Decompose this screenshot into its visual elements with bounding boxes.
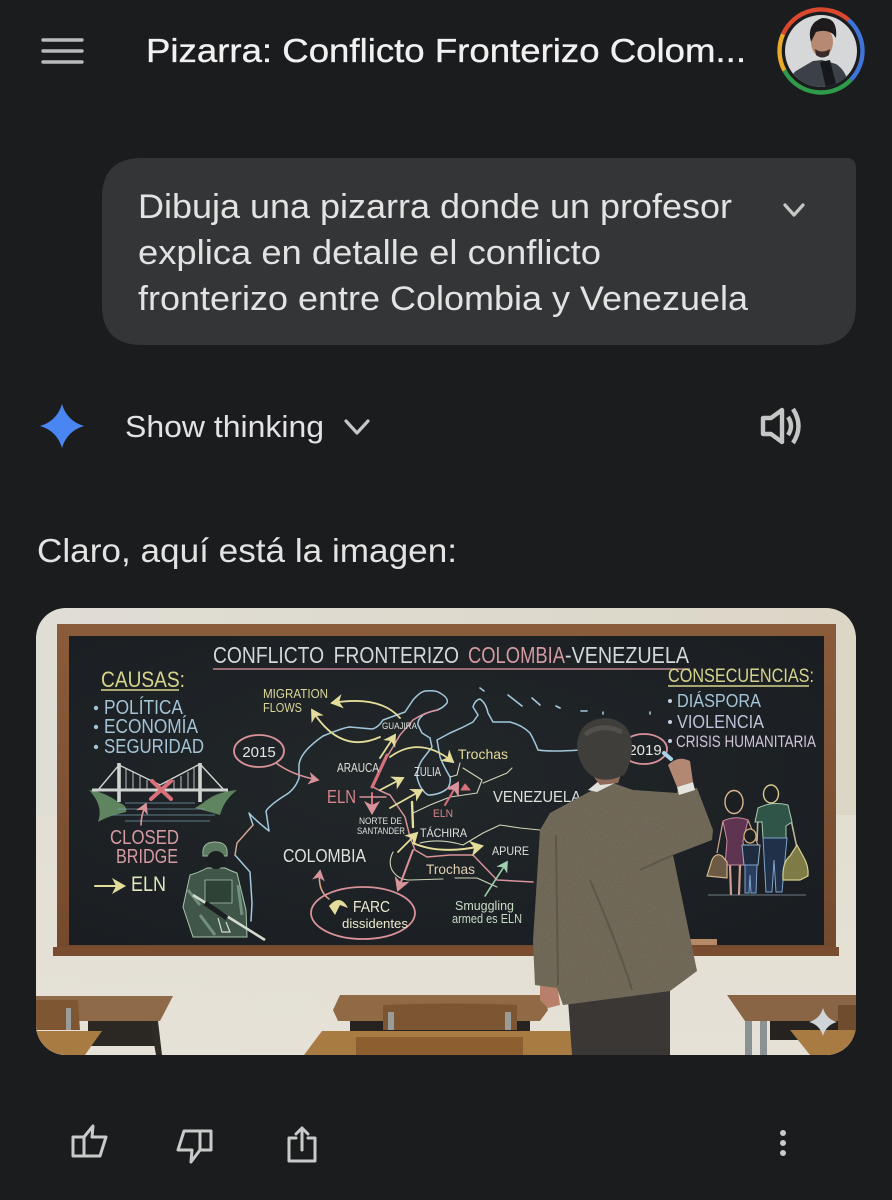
2015 callout <box>234 735 318 780</box>
causes list: SEGURIDAD <box>104 736 204 758</box>
map labels: COLOMBIA <box>283 846 366 866</box>
user prompt bubble <box>102 158 856 345</box>
icon: share <box>289 1128 315 1161</box>
inner states <box>413 763 512 813</box>
blackboard <box>53 624 839 956</box>
chalk piece on tray <box>690 939 717 945</box>
consequences list: CRISIS HUMANITARIA <box>676 733 816 751</box>
map labels: ELN <box>433 808 453 820</box>
icon: thumbs up <box>73 1126 106 1156</box>
caribbean islands <box>480 688 650 714</box>
consequences list: CONSECUENCIAS: <box>668 666 814 687</box>
right hand <box>668 759 693 787</box>
prompt text <box>138 188 748 318</box>
chat title: Pizarra: Conflicto Fronterizo Colom... <box>146 32 746 69</box>
icon: sparkle <box>40 404 84 448</box>
hair highlight <box>585 728 622 735</box>
2019 callout: 2019 <box>628 742 662 759</box>
head <box>577 718 632 780</box>
closed bridge label <box>110 830 178 863</box>
back left desk <box>36 996 173 1021</box>
response text: Claro, aquí está la imagen: <box>37 532 457 569</box>
map labels: ELN <box>327 787 356 807</box>
bridge arrow <box>141 804 146 825</box>
chalk title <box>213 647 690 670</box>
chalk title: CONFLICTO FRONTERIZO <box>213 642 459 668</box>
map labels: TÁCHIRA <box>420 825 467 840</box>
board frame <box>57 624 836 951</box>
back right desk <box>727 995 856 1021</box>
border line <box>373 710 533 882</box>
jacket folds <box>556 835 673 990</box>
causes list: CAUSAS: <box>101 667 185 692</box>
causes list: POLÍTICA <box>104 696 184 719</box>
map labels: SANTANDER <box>357 826 405 836</box>
consequences list <box>668 666 816 751</box>
migration flows arrows <box>332 701 400 718</box>
icon: speaker <box>763 409 798 443</box>
chalk drawing: closed bridge <box>89 763 237 825</box>
board surface <box>69 636 824 945</box>
chalk stick <box>664 753 671 759</box>
man <box>757 815 797 848</box>
prompt text: fronterizo entre Colombia y Venezuela <box>138 280 748 318</box>
map labels: MIGRATION <box>263 686 328 701</box>
map labels: GUAJIRA <box>382 721 418 732</box>
map labels: Trochas <box>426 861 475 877</box>
consequences list: VIOLENCIA <box>677 712 764 732</box>
chalk tray <box>53 947 839 956</box>
shirt cuff <box>677 782 695 795</box>
map labels: VENEZUELA <box>493 789 581 806</box>
consequences list: DIÁSPORA <box>677 691 761 711</box>
FARC callout <box>311 871 415 939</box>
icon: more menu <box>780 1130 786 1156</box>
FARC callout: FARC <box>353 899 390 916</box>
icon: chevron <box>346 421 368 433</box>
trousers <box>568 985 670 1055</box>
map labels <box>263 686 581 926</box>
chalk title: -VENEZUELA <box>565 642 690 668</box>
shirt collar <box>588 780 617 792</box>
avatar with ring <box>780 9 863 92</box>
closed bridge label: BRIDGE <box>116 846 178 868</box>
jacket <box>533 782 713 1005</box>
woman <box>717 820 758 895</box>
show thinking label: Show thinking <box>125 409 324 444</box>
ELN arrow label: ELN <box>131 873 166 896</box>
classroom desks <box>36 995 856 1055</box>
top bar <box>43 9 863 92</box>
causes list: ECONOMÍA <box>104 715 199 738</box>
icon: expand chevron <box>785 205 803 215</box>
bags <box>707 855 727 878</box>
map labels: APURE <box>492 844 529 858</box>
classroom wall <box>36 608 856 1055</box>
generated classroom image <box>36 608 856 1055</box>
map labels: NORTE DE <box>359 816 402 826</box>
chalk drawing: migrant family <box>707 785 808 895</box>
back center desk <box>333 995 548 1021</box>
map labels: ARAUCA <box>337 761 380 775</box>
neck <box>590 772 622 785</box>
map labels: Trochas <box>458 746 508 762</box>
ELN arrow label <box>94 876 165 894</box>
chalk map <box>235 688 650 921</box>
map labels: armed es ELN <box>452 912 522 926</box>
smuggling arrow <box>485 862 507 896</box>
red cross <box>151 781 171 799</box>
professor <box>533 718 713 1055</box>
thinking row <box>40 404 798 448</box>
prompt text: Dibuja una pizarra donde un profesor <box>138 188 732 226</box>
colombia and venezuela coast <box>323 691 447 738</box>
action bar <box>73 1126 786 1162</box>
closed bridge label: CLOSED <box>110 827 179 849</box>
front center desk <box>304 1031 590 1055</box>
image watermark sparkle <box>809 1008 837 1036</box>
icon: menu <box>43 40 82 62</box>
2019 callout <box>630 733 668 765</box>
ground shadow <box>708 894 806 896</box>
chalk drawing: soldier <box>183 842 265 940</box>
map labels: Smuggling <box>455 899 514 913</box>
map labels: FLOWS <box>263 700 302 715</box>
icon: thumbs down <box>178 1131 211 1162</box>
child <box>744 829 756 843</box>
chalk title: COLOMBIA <box>468 642 566 668</box>
2015 callout: 2015 <box>242 744 276 761</box>
eln arrows <box>372 755 387 787</box>
map labels: ZULIA <box>414 764 441 779</box>
left hand <box>540 983 560 1008</box>
pacific coast <box>249 736 323 831</box>
causes list <box>94 672 204 753</box>
FARC callout: dissidentes <box>342 916 408 931</box>
prompt text: explica en detalle el conflicto <box>138 234 601 272</box>
